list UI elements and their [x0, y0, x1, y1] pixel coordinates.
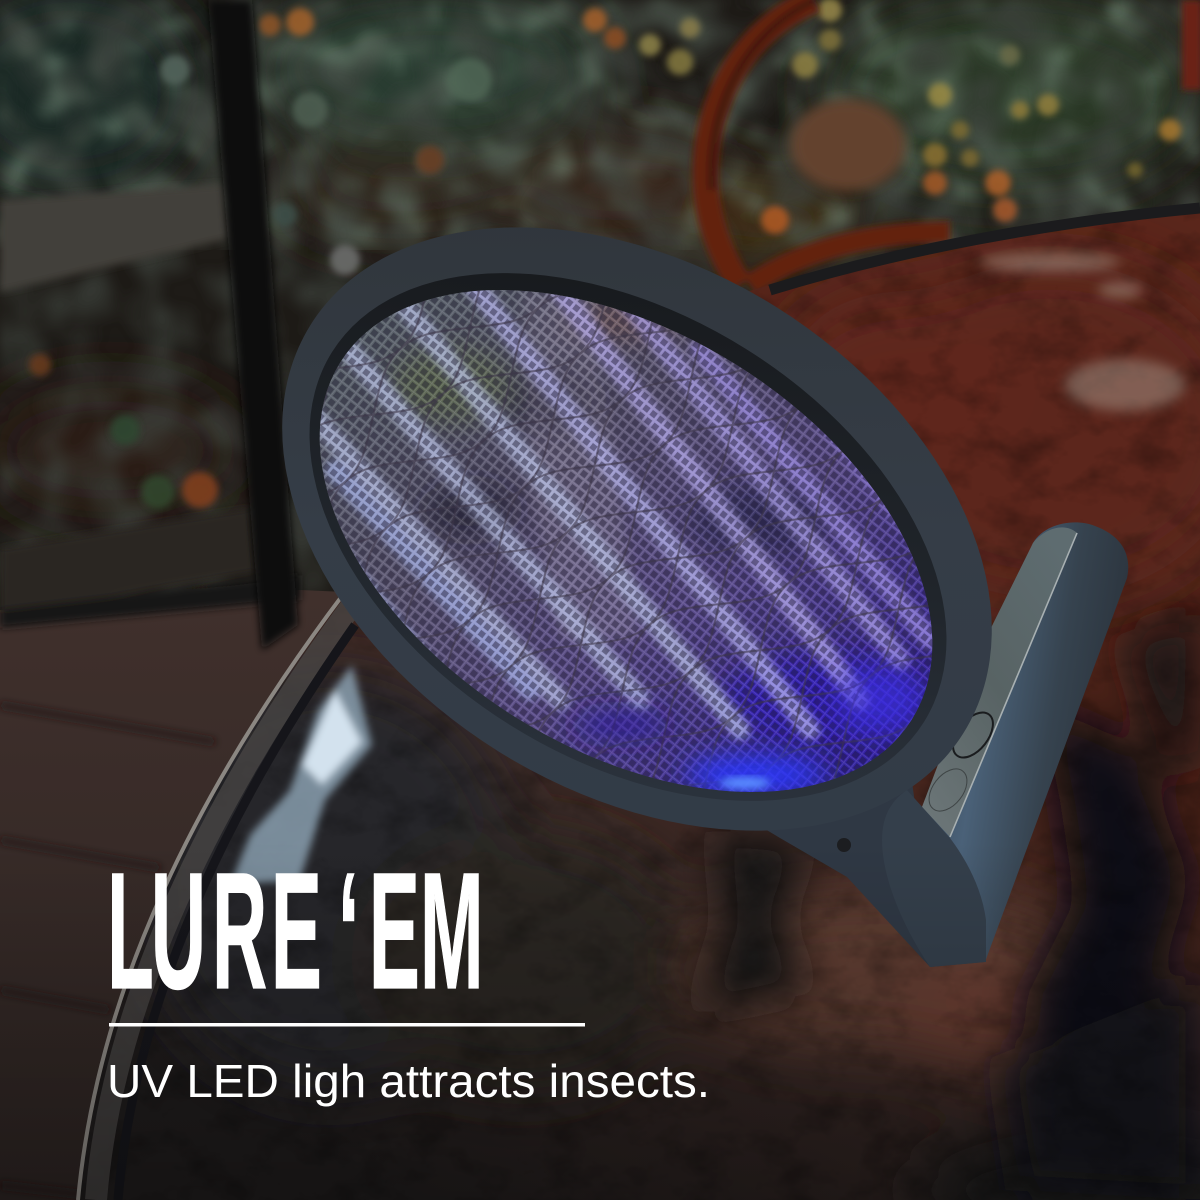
electric swatter racket — [156, 228, 1128, 970]
upper right glare — [980, 252, 1185, 411]
caption block — [107, 839, 710, 1107]
handle elbow — [882, 790, 986, 967]
blurred ball — [790, 99, 906, 191]
table surface patches — [158, 222, 1200, 1200]
bench planks — [0, 184, 300, 628]
racket ring — [172, 103, 1102, 955]
fence post — [208, 0, 298, 650]
title: LURE ‘EM — [107, 839, 484, 1024]
mesh colour depth — [390, 300, 920, 746]
red hose reel — [705, 0, 1192, 285]
central band — [520, 290, 640, 640]
power button — [945, 705, 1001, 765]
blue UV glow — [570, 666, 925, 793]
racket neck — [700, 690, 984, 967]
screw — [837, 838, 851, 852]
ring inner bevel — [214, 164, 1042, 910]
mesh panel — [320, 290, 932, 792]
wide wire mesh — [320, 290, 932, 789]
silver control panel — [922, 527, 1077, 837]
diagonal light tubes — [300, 280, 960, 730]
table rim — [78, 208, 1200, 1200]
subtitle: UV LED ligh attracts insects. — [107, 1055, 710, 1107]
wooden deck — [0, 590, 345, 1200]
panel seam — [950, 533, 1077, 837]
blurred garden background — [0, 0, 1200, 640]
divider rule — [109, 1023, 585, 1026]
deck board gaps — [0, 705, 215, 1195]
handle — [921, 522, 1128, 962]
mode button — [921, 762, 975, 818]
fine mesh — [320, 290, 932, 792]
round metal table — [82, 214, 1200, 1200]
dark gradient behind caption — [0, 840, 1200, 1200]
white light reflection — [230, 665, 372, 885]
